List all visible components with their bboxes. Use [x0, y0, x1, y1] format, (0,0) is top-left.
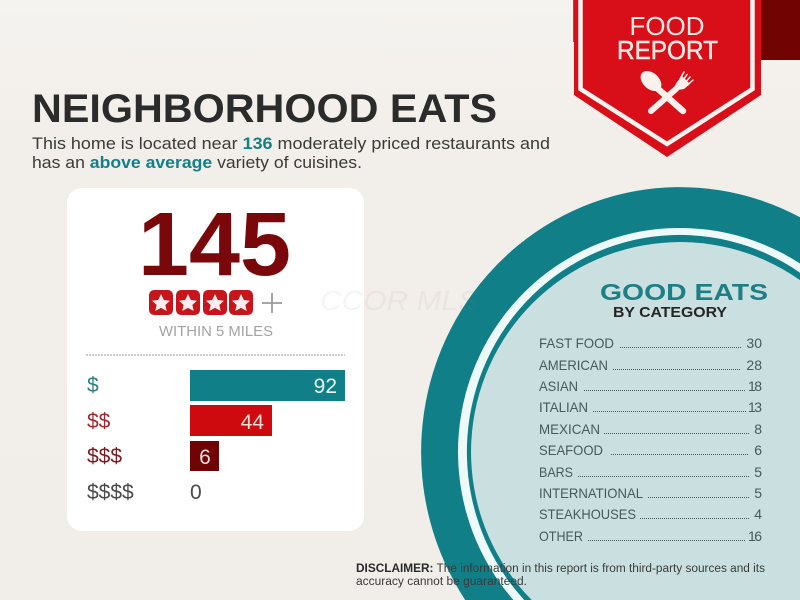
- panel: good eats circle: [421, 187, 800, 600]
- icon: crossed spoon and fork: [637, 67, 693, 111]
- bar: one dollar: 92: [314, 375, 337, 398]
- badge text: [617, 13, 718, 65]
- disclaimer: [356, 563, 765, 588]
- maroon ribbon: [760, 0, 800, 60]
- badge text: REPORT: [617, 37, 718, 65]
- row: seafood: [539, 442, 762, 458]
- disclaimer: DISCLAIMER: The information in this report is from third-party sources and its: [356, 563, 765, 575]
- disclaimer: accuracy cannot be guaranteed.: [356, 576, 527, 588]
- row: international: 5: [754, 485, 762, 501]
- row: asian: 18: [748, 378, 762, 394]
- category heading: [600, 279, 768, 321]
- row: mexican: 8: [754, 421, 762, 437]
- row: asian: [539, 378, 762, 394]
- category heading: BY CATEGORY: [613, 304, 727, 321]
- row: international: INTERNATIONAL: [539, 485, 643, 501]
- bar: three dollars: [87, 441, 219, 471]
- row: bars: [539, 464, 762, 480]
- bar: four dollars: 0: [190, 481, 202, 504]
- price tier bar chart: [87, 370, 345, 504]
- row: mexican: [539, 421, 762, 437]
- bar: three dollars: $$$: [87, 445, 122, 468]
- row: american: [539, 357, 762, 373]
- row: international: [539, 485, 762, 501]
- intro text: [32, 134, 550, 172]
- row: italian: 13: [748, 399, 762, 415]
- row: italian: ITALIAN: [539, 399, 588, 415]
- intro text: This home is located near 136 moderately priced restaurants and: [32, 134, 550, 153]
- panel: restaurant count card: [67, 188, 364, 531]
- row: bars: 5: [754, 464, 762, 480]
- row: other: 16: [748, 528, 762, 544]
- row: italian: [539, 399, 762, 415]
- bar: two dollars: [87, 405, 272, 436]
- row: other: OTHER: [539, 528, 583, 544]
- row: american: 28: [746, 357, 762, 373]
- bar: three dollars: 6: [199, 446, 211, 469]
- row: american: AMERICAN: [539, 357, 608, 373]
- row: steakhouses: STEAKHOUSES: [539, 506, 636, 522]
- row: seafood: 6: [754, 442, 762, 458]
- row: mexican: MEXICAN: [539, 421, 600, 437]
- bar: one dollar: [87, 370, 345, 401]
- row: other: [539, 528, 762, 544]
- bar: four dollars: [87, 481, 202, 504]
- bar: two dollars: 44: [241, 411, 264, 434]
- bar: four dollars: $$$$: [87, 481, 134, 504]
- row: fast food: [539, 335, 762, 351]
- category heading: GOOD EATS: [600, 279, 768, 305]
- row: asian: ASIAN: [539, 378, 578, 394]
- title: NEIGHBORHOOD EATS: [32, 87, 497, 131]
- icon: four star rating: [149, 290, 253, 315]
- bar: one dollar: $: [87, 374, 99, 397]
- watermark: CCOR MLS: [320, 285, 478, 316]
- row: bars: BARS: [539, 464, 573, 480]
- row: steakhouses: 4: [754, 506, 762, 522]
- distance label: WITHIN 5 MILES: [159, 324, 273, 340]
- bar: two dollars: $$: [87, 410, 111, 433]
- row: seafood: SEAFOOD: [539, 442, 603, 458]
- icon: plus: [262, 293, 282, 313]
- row: fast food: FAST FOOD: [539, 335, 614, 351]
- big number: 145: [138, 195, 291, 295]
- row: fast food: 30: [746, 335, 762, 351]
- badge text: FOOD: [630, 13, 704, 41]
- category list: [539, 335, 762, 544]
- badge: food report: [573, 0, 761, 157]
- row: steakhouses: [539, 506, 762, 522]
- intro text: has an above average variety of cuisines.: [32, 153, 362, 172]
